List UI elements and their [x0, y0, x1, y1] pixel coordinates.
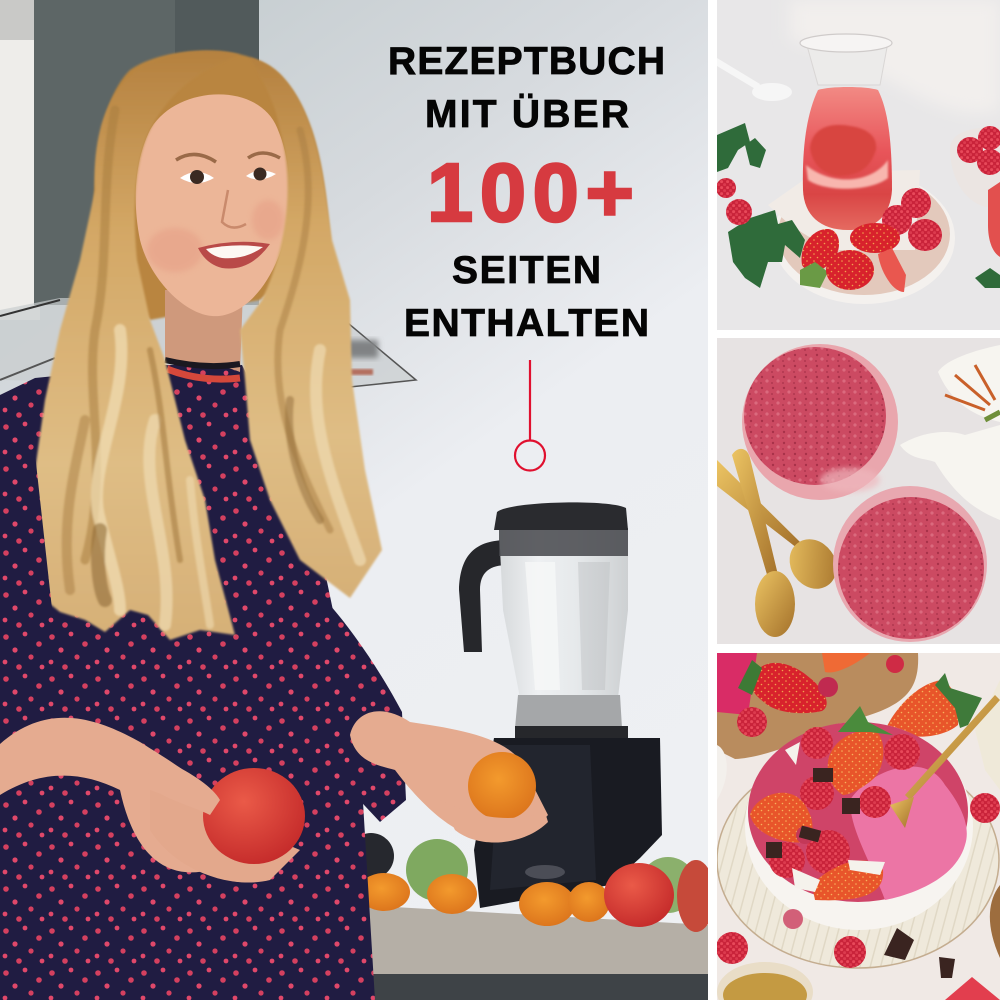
gold spoons [717, 449, 846, 637]
blender handle [459, 540, 501, 652]
red box corner [945, 977, 1000, 1000]
strawberry leaves [935, 673, 982, 728]
raspberries [716, 178, 942, 251]
strawberries on board [737, 653, 904, 737]
ridged plate [717, 752, 999, 968]
right forearm and hand [350, 711, 548, 840]
title line: Rezeptbuch: REZEPTBUCH [388, 40, 665, 83]
wooden bowl at edge [990, 885, 1000, 958]
blender [459, 502, 662, 908]
title line: enthalten: ENTHALTEN [404, 302, 649, 345]
paper under bottle [768, 170, 920, 250]
kitchen counter [360, 905, 708, 1000]
dress [0, 365, 375, 1000]
blade collar [515, 695, 622, 728]
panel: smoothie bowl with berries [716, 653, 1000, 1000]
blender lid [494, 502, 628, 530]
title line: mit über: MIT ÜBER [425, 93, 629, 136]
toppings [750, 706, 920, 900]
mint leaves [717, 123, 1000, 288]
woman [0, 51, 548, 1000]
kitchen wall background [0, 0, 708, 1000]
granola bowl [717, 962, 813, 1000]
big number 100+: 100+ [427, 146, 634, 239]
large strawberry [886, 680, 960, 737]
photo: woman with blender [0, 0, 715, 1000]
spoon [717, 58, 792, 101]
gold spoon [905, 695, 1000, 800]
blender jar [499, 528, 628, 698]
fruit on counter [348, 833, 715, 932]
bottle [800, 34, 892, 230]
pink packet [717, 653, 757, 715]
panel background [717, 0, 1000, 330]
hand under apple [200, 845, 300, 882]
panel: two pink smoothies with gold spoons [717, 338, 1000, 644]
hair strands left [67, 110, 210, 625]
motor base [474, 738, 662, 908]
hair front right [240, 58, 382, 598]
eyes [176, 153, 280, 184]
smoothie glass 2 [833, 486, 987, 642]
panel background [717, 653, 1000, 1000]
pointer line with circle [515, 360, 545, 470]
side plate [975, 680, 1000, 790]
apple in hand [203, 768, 305, 864]
fingers on orange [454, 816, 548, 842]
small bowl left [717, 745, 727, 800]
left sleeve and arm [0, 390, 220, 872]
smile [198, 242, 270, 268]
collar stripes [165, 360, 240, 379]
right sleeve [330, 605, 406, 822]
wooden board [717, 653, 918, 759]
face [136, 94, 290, 316]
title line: Seiten: SEITEN [452, 249, 601, 292]
fingers on apple [180, 768, 220, 815]
smoothie glass 1 [742, 344, 898, 500]
panel: red smoothie jar with strawberries [716, 0, 1000, 330]
plate [768, 170, 955, 304]
bowl [745, 695, 1000, 930]
pink smoothie [748, 722, 968, 902]
panel background [717, 338, 1000, 644]
orange in hand [468, 752, 536, 820]
white lily [900, 345, 1000, 520]
strawberries [800, 223, 906, 292]
nose [222, 190, 246, 228]
hair front left [36, 50, 239, 642]
granola [723, 973, 807, 1000]
scattered berries and chocolate [716, 793, 1000, 978]
heading text [388, 40, 665, 345]
neck [165, 290, 243, 372]
bowl of raspberries [957, 126, 1000, 175]
glass shelf [0, 298, 416, 388]
second glass [988, 182, 1000, 257]
blurred cloth top [798, 8, 992, 106]
hair strands right [278, 130, 360, 560]
hair crown [94, 51, 330, 320]
